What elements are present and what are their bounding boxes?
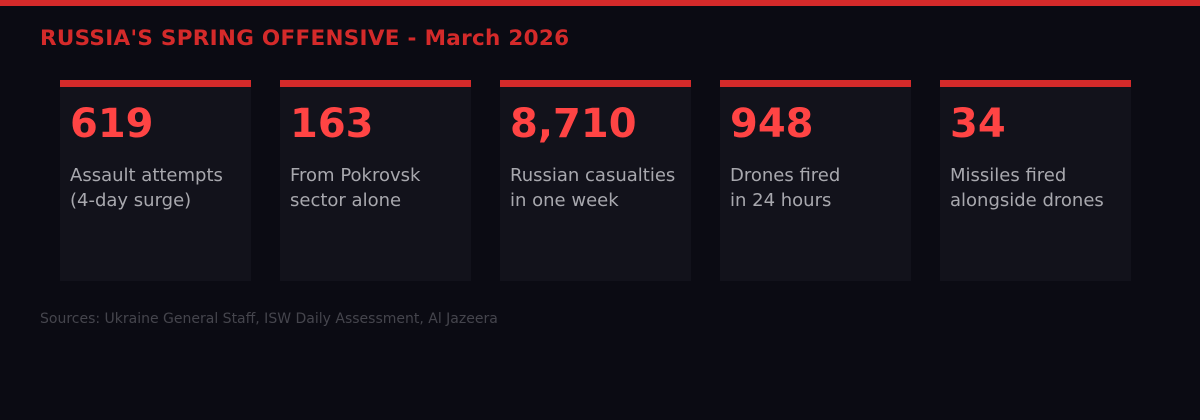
label: drones: Drones fired — [730, 165, 840, 186]
title: RUSSIA'S SPRING OFFENSIVE - March 2026 — [40, 26, 569, 51]
number: 948: 948 — [730, 101, 814, 147]
number: 8,710: 8,710 — [510, 101, 637, 147]
label: Pokrovsk: From Pokrovsk — [290, 165, 420, 186]
card: missiles — [940, 80, 1131, 281]
label: missiles: alongside drones — [950, 190, 1104, 210]
label: drones: in 24 hours — [730, 190, 831, 210]
card: Pokrovsk — [280, 80, 471, 281]
label: Pokrovsk — [290, 165, 420, 210]
card: drones — [720, 80, 911, 281]
card: casualties — [500, 80, 691, 281]
label: assault attempts: (4-day surge) — [70, 190, 191, 210]
label: casualties — [510, 165, 675, 210]
label: missiles: Missiles fired — [950, 165, 1066, 186]
card: assault attempts — [60, 80, 251, 281]
label: casualties: Russian casualties — [510, 165, 675, 186]
label: assault attempts: Assault attempts — [70, 165, 223, 186]
label: drones — [730, 165, 840, 210]
label: casualties: in one week — [510, 190, 619, 210]
number: 619: 619 — [70, 101, 154, 147]
number: 163: 163 — [290, 101, 374, 147]
label: Pokrovsk: sector alone — [290, 190, 401, 210]
number: 34: 34 — [950, 101, 1006, 147]
sources: Sources: Ukraine General Staff, ISW Daily Assessment, Al Jazeera — [40, 311, 498, 327]
label: missiles — [950, 165, 1104, 210]
label: assault attempts — [70, 165, 223, 210]
